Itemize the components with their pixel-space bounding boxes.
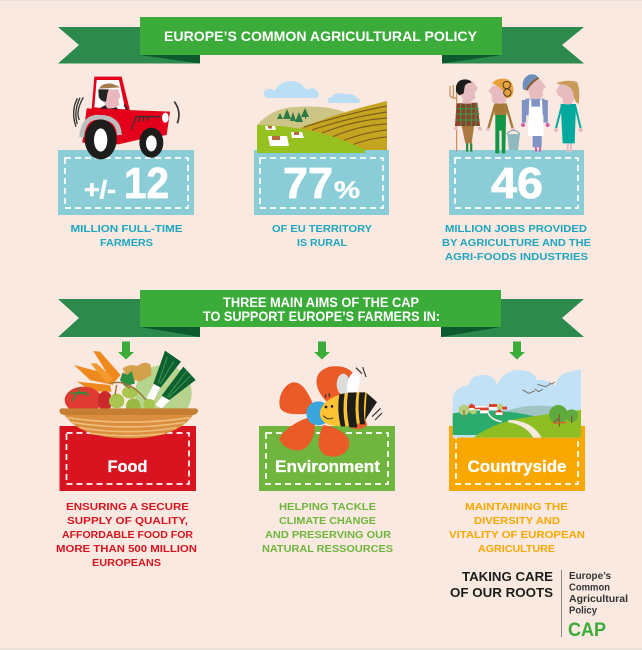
caption: countryside: VITALITY OF EUROPEAN <box>449 529 585 541</box>
caption: countryside <box>449 501 585 555</box>
title: EUROPE’S COMMON AGRICULTURAL POLICY <box>164 28 478 44</box>
caption: farmers <box>70 223 182 249</box>
farmer in teal dress <box>554 81 583 152</box>
caption: jobs: AGRI-FOODS INDUSTRIES <box>445 251 588 263</box>
section heading <box>203 294 440 324</box>
arrow: to food <box>118 342 134 360</box>
stat panel: 77 percent: % <box>334 177 360 204</box>
farmer with curly hair <box>486 79 515 153</box>
farmer with apron <box>521 74 550 152</box>
caption: countryside: DIVERSITY AND <box>474 515 560 527</box>
stat panel: 77 percent <box>254 150 389 215</box>
logo: Europe's Common Agricultural Policy CAP: Policy <box>569 604 597 616</box>
caption: food: SUPPLY OF QUALITY, <box>67 515 188 527</box>
caption: environment <box>262 501 393 555</box>
icon: countryside landscape <box>453 370 581 438</box>
stat panel: 46 million jobs <box>449 150 584 215</box>
caption: food <box>56 501 197 569</box>
caption: jobs: BY AGRICULTURE AND THE <box>442 237 591 249</box>
caption: food: MORE THAN 500 MILLION <box>56 543 197 555</box>
stat panel: 12 million farmers: +/- <box>84 176 116 204</box>
logo: Europe's Common Agricultural Policy CAP: CAP <box>568 620 606 641</box>
panel: environment <box>259 426 395 491</box>
stat panel: 77 percent: 77 <box>283 159 333 208</box>
panel: countryside <box>449 426 585 491</box>
logo: Europe's Common Agricultural Policy CAP: Europe’s <box>569 570 611 582</box>
arrow: to environment <box>314 342 330 360</box>
logo: Europe's Common Agricultural Policy CAP <box>561 570 628 641</box>
caption: environment: HELPING TACKLE <box>279 501 376 513</box>
icon: rural landscape <box>257 81 387 153</box>
caption: countryside: MAINTAINING THE <box>465 501 568 513</box>
caption: jobs: MILLION JOBS PROVIDED <box>445 223 587 235</box>
icon: four farmers <box>450 74 583 153</box>
tagline: OF OUR ROOTS <box>450 585 553 600</box>
caption: food: EUROPEANS <box>92 557 161 569</box>
arrow: to countryside <box>509 342 525 360</box>
tagline: TAKING CARE <box>462 569 553 584</box>
stat panel: 12 million farmers: 12 <box>124 159 169 208</box>
section heading: THREE MAIN AIMS OF THE CAP <box>223 294 419 310</box>
section heading: TO SUPPORT EUROPE’S FARMERS IN: <box>203 308 440 324</box>
caption: countryside: AGRICULTURE <box>478 543 555 555</box>
caption: environment: NATURAL RESSOURCES <box>262 543 393 555</box>
caption: food: ENSURING A SECURE <box>66 501 189 513</box>
logo: Europe's Common Agricultural Policy CAP: Common <box>569 582 610 594</box>
pitchfork <box>450 85 457 152</box>
bucket <box>507 134 520 150</box>
title banner <box>58 17 584 64</box>
caption: rural territory: OF EU TERRITORY <box>272 223 372 235</box>
panel: countryside: Countryside <box>468 457 566 476</box>
icon: basket of vegetables <box>59 351 198 438</box>
panel: environment: Environment <box>275 457 380 476</box>
tagline <box>450 569 553 600</box>
caption: food: AFFORDABLE FOOD FOR <box>62 529 193 541</box>
stat panel: 46 million jobs: 46 <box>491 159 543 208</box>
caption: farmers: MILLION FULL-TIME <box>70 223 182 235</box>
caption: environment: CLIMATE CHANGE <box>279 515 376 527</box>
logo: Europe's Common Agricultural Policy CAP: Agricultural <box>569 593 628 605</box>
panel: food: Food <box>108 457 148 476</box>
caption: farmers: FARMERS <box>100 237 153 249</box>
panel: food <box>60 426 196 491</box>
section banner <box>58 290 584 337</box>
caption: rural territory: IS RURAL <box>297 237 348 249</box>
stat panel: 12 million farmers <box>58 150 194 215</box>
caption: jobs <box>442 223 591 263</box>
farmer with checked shirt <box>454 79 482 152</box>
icon: bee on flower <box>279 366 382 457</box>
caption: environment: AND PRESERVING OUR <box>265 529 391 541</box>
cows <box>265 126 276 130</box>
caption: rural territory <box>272 223 372 249</box>
icon: farmer on red tractor <box>74 77 179 159</box>
